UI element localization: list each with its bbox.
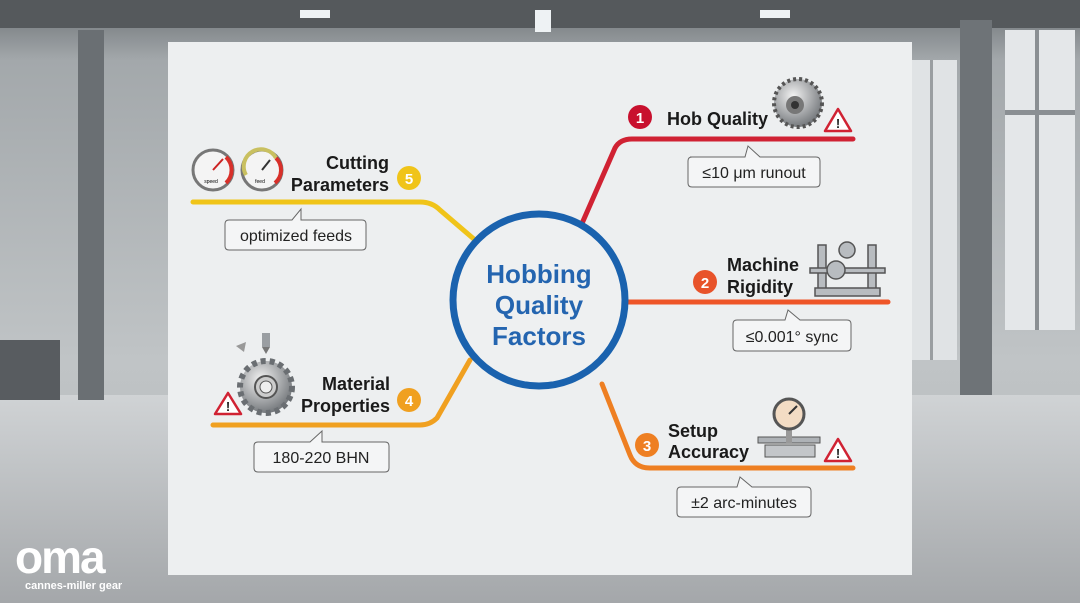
branch 3: Setup Accuracy: 3 [643, 438, 651, 455]
icon: warning: ! [226, 399, 230, 414]
branch 5: Cutting Parameters [193, 149, 421, 250]
icon: warning [215, 393, 241, 414]
icon: warning: ! [836, 116, 840, 131]
callout: 180-220 BHN [273, 450, 369, 467]
icon: gauges: speed [204, 179, 218, 185]
logo: cannes-miller gear [25, 580, 123, 592]
logo: oma [15, 531, 106, 583]
icon: dial indicator [758, 399, 820, 457]
icon: hob gear [774, 79, 822, 127]
branch 2: Machine Rigidity [693, 242, 885, 351]
callout [254, 431, 389, 472]
branch 1: Hob Quality [628, 79, 851, 187]
callout [225, 209, 366, 250]
center circle: Quality [495, 290, 584, 320]
callout: ≤0.001° sync [746, 329, 838, 346]
branch 1: Hob Quality: 1 [636, 110, 644, 127]
center circle [453, 214, 625, 386]
branch 4: Material Properties: Material [322, 374, 390, 394]
branch 5: Cutting Parameters: Parameters [291, 175, 389, 195]
center circle: Hobbing [486, 259, 592, 289]
branch 4: Material Properties: Properties [301, 396, 390, 416]
branch 2: Machine Rigidity: Machine [727, 255, 799, 275]
icon: gauges: feed [255, 179, 265, 185]
branch 2: Machine Rigidity: Rigidity [727, 277, 793, 297]
icon: gauges [193, 149, 282, 190]
icon: gear with tool [236, 333, 292, 413]
center circle: Factors [492, 321, 586, 351]
icon: machine [810, 242, 885, 296]
callout [688, 146, 820, 187]
branch 1: Hob Quality: Hob Quality [667, 109, 768, 129]
branch 3: Setup Accuracy [635, 399, 851, 517]
logo [15, 531, 123, 592]
branch 2: Machine Rigidity: 2 [701, 275, 709, 292]
callout: ±2 arc-minutes [691, 495, 797, 512]
branch lines [193, 139, 888, 468]
icon: warning [825, 439, 851, 461]
callout [733, 310, 851, 351]
icon: warning [825, 109, 851, 131]
callout [677, 477, 811, 517]
callout: optimized feeds [240, 228, 352, 245]
branch 3: Setup Accuracy: Setup [668, 421, 718, 441]
icon: warning: ! [836, 446, 840, 461]
branch 3: Setup Accuracy: Accuracy [668, 442, 749, 462]
branch 4: Material Properties [215, 333, 421, 472]
callout: ≤10 μm runout [702, 165, 806, 182]
board [168, 42, 912, 575]
branch 5: Cutting Parameters: 5 [405, 171, 413, 188]
branch 5: Cutting Parameters: Cutting [326, 153, 389, 173]
branch 4: Material Properties: 4 [405, 393, 414, 410]
